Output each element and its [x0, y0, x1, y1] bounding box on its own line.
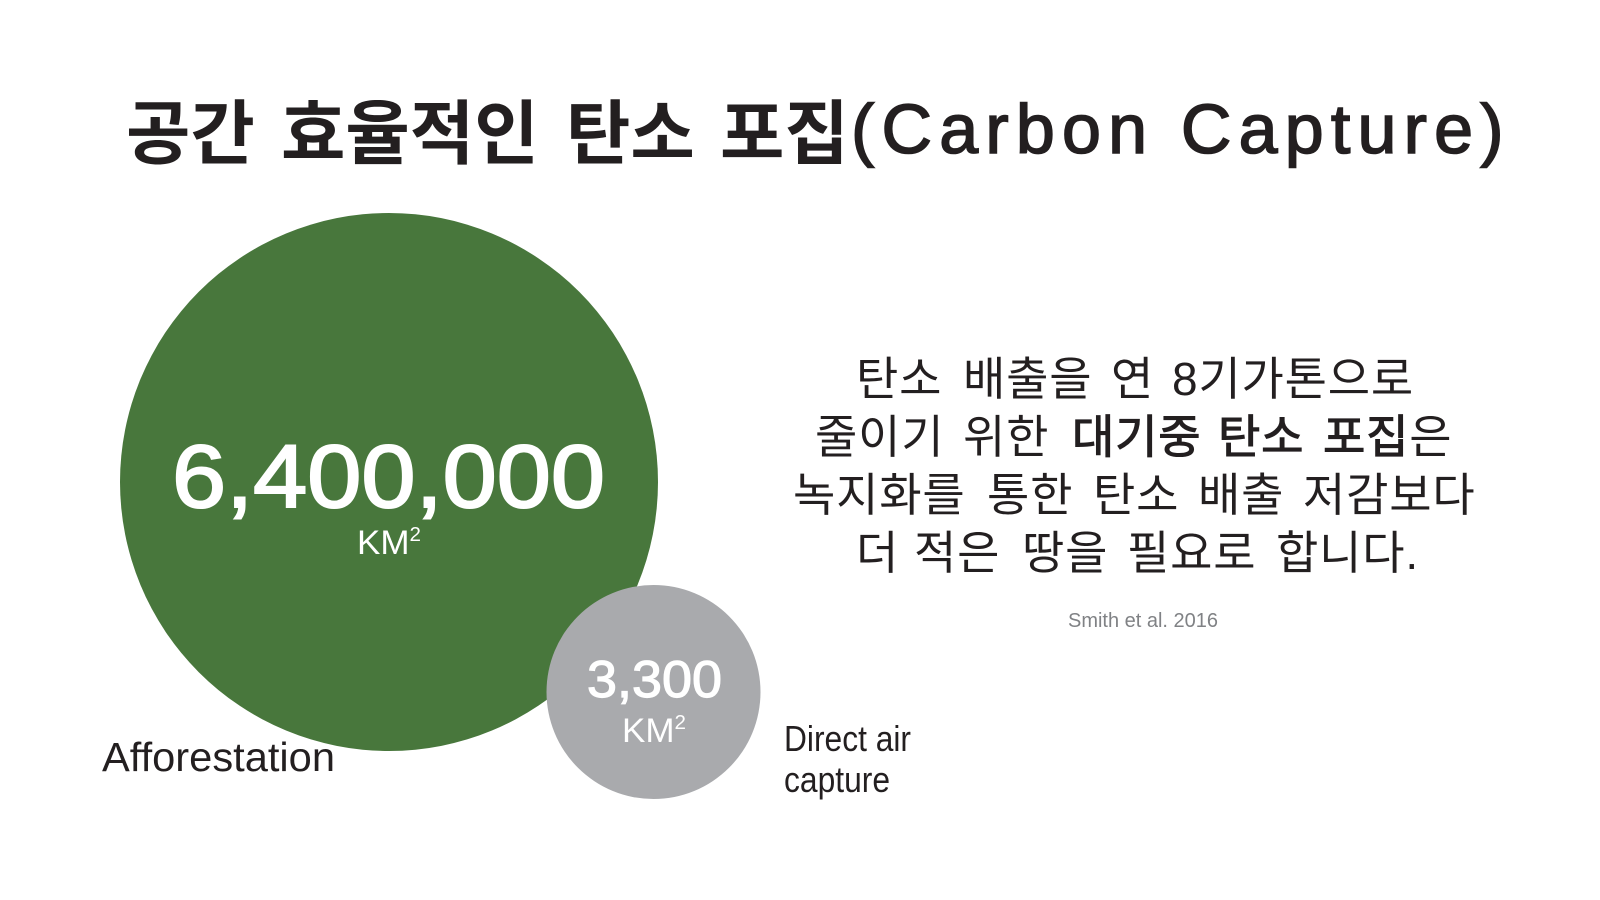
title — [126, 90, 1507, 173]
title: 포집 — [720, 95, 849, 173]
circle: afforestation: KM — [357, 524, 408, 562]
text block: key message: 8기가톤으로 — [1172, 353, 1414, 405]
text block: key message: 땅을 — [1022, 527, 1108, 579]
text block: key message — [793, 353, 1475, 579]
text block: key message: 배출 — [1198, 469, 1284, 521]
title: 공간 — [126, 95, 255, 173]
source citation: Smith et al. 2016 — [1068, 610, 1218, 632]
text block: key message: 적은 — [914, 527, 1000, 579]
text block: key message: 통한 — [987, 469, 1073, 521]
text block: key message: 배출을 — [963, 353, 1092, 405]
label: direct air capture: capture — [784, 759, 890, 800]
text block: key message: 연 — [1111, 353, 1154, 405]
text block: key message: 탄소 — [1093, 469, 1179, 521]
text block: key message: 탄소 — [1218, 411, 1304, 463]
title: 탄소 — [566, 95, 695, 173]
text block: key message: 탄소 — [856, 353, 942, 405]
circle: afforestation: 2 — [410, 524, 421, 546]
text block: key message: 더 — [856, 527, 899, 579]
title: 효율적인 — [281, 95, 539, 173]
text block: key message: 필요로 — [1127, 527, 1256, 579]
circle: afforestation: 6,400,000 — [172, 426, 605, 526]
circle: direct air capture: KM — [622, 712, 673, 750]
label: direct air capture: Direct air — [784, 718, 911, 759]
title: (Carbon Capture) — [851, 90, 1507, 168]
circle: direct air capture: 3,300 — [587, 651, 722, 709]
label: afforestation: Afforestation — [102, 734, 335, 780]
circle: direct air capture — [546, 585, 760, 799]
text block: key message: 포집 — [1323, 411, 1409, 463]
text block: key message: 대기중 — [1072, 411, 1201, 463]
label: direct air capture — [784, 718, 911, 800]
text block: key message: 저감보다 — [1303, 469, 1475, 521]
chart: land area comparison circles — [102, 213, 911, 800]
text block: key message: 녹지화를 — [793, 469, 965, 521]
text block: key message: 은 — [1409, 411, 1452, 463]
circle: afforestation — [120, 213, 658, 751]
text block: key message: 줄이기 — [815, 411, 944, 463]
text block: key message: 위한 — [963, 411, 1049, 463]
circle: direct air capture: 2 — [675, 712, 686, 734]
text block: key message: 합니다. — [1276, 527, 1419, 579]
